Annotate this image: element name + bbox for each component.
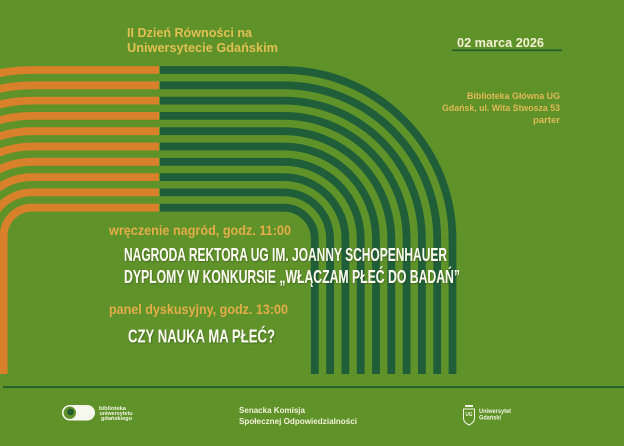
- logo: University of Gdańsk: Uniwersytet: [479, 409, 511, 415]
- panel discussion time: panel dyskusyjny, godz. 13:00: [109, 302, 288, 317]
- venue: Gdańsk, ul. Wita Stwosza 53: [442, 103, 560, 113]
- logo: university library: [62, 405, 133, 422]
- committee name: Społecznej Odpowiedzialności: [239, 417, 357, 426]
- award headline: NAGRODA REKTORA UG IM. JOANNY SCHOPENHAUER: [124, 244, 447, 265]
- title: [127, 26, 278, 55]
- footer divider: [3, 386, 624, 388]
- logo: university library: biblioteka: [99, 406, 126, 412]
- award headline: [124, 244, 460, 287]
- logo: university library: gdańskiego: [101, 416, 133, 422]
- venue: Biblioteka Główna UG: [467, 91, 560, 101]
- dark green stripes: [160, 70, 452, 374]
- committee name: [239, 406, 357, 426]
- logo: University of Gdańsk: UG: [466, 412, 473, 418]
- title: II Dzień Równości na: [127, 26, 253, 40]
- venue: parter: [533, 115, 561, 125]
- orange stripes: [0, 70, 159, 374]
- title: Uniwersytecie Gdańskim: [127, 41, 278, 55]
- logo: University of Gdańsk: Gdański: [479, 416, 501, 422]
- logo: university library: uniwersytetu: [100, 411, 132, 417]
- award ceremony time: wręczenie nagród, godz. 11:00: [108, 223, 291, 238]
- venue: [442, 91, 561, 125]
- panel headline: CZY NAUKA MA PŁEĆ?: [128, 326, 275, 346]
- award headline: DYPLOMY W KONKURSIE „WŁĄCZAM PŁEĆ DO BADAŃ”: [124, 266, 460, 287]
- date: 02 marca 2026: [457, 36, 544, 50]
- logo: University of Gdańsk: [464, 405, 511, 425]
- committee name: Senacka Komisja: [239, 406, 306, 415]
